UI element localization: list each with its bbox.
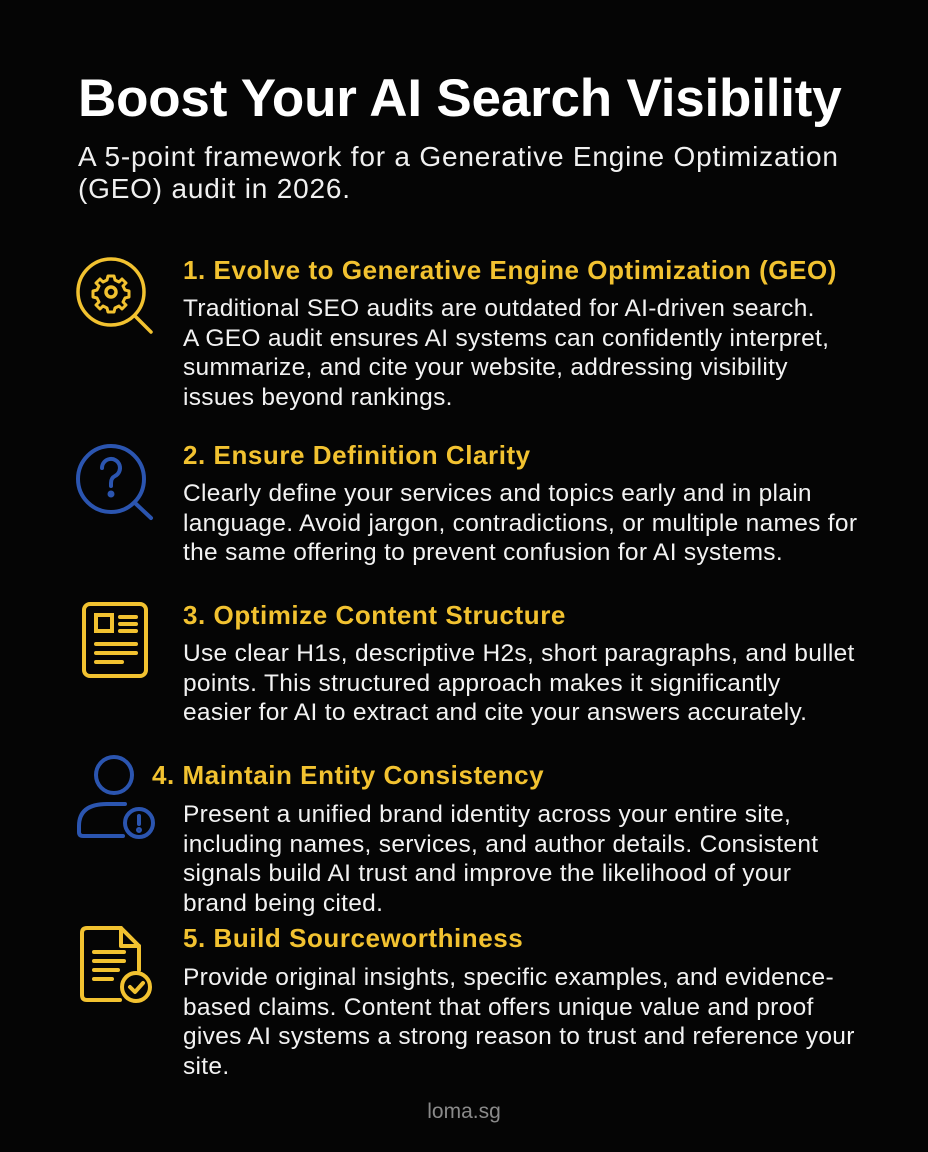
item 4 body: including names, services, and author details. Consistent xyxy=(183,830,818,858)
title: Boost Your AI Search Visibility xyxy=(78,69,842,128)
item 3 body xyxy=(183,640,855,726)
item 4 body: signals build AI trust and improve the likelihood of your xyxy=(183,860,791,887)
item 5 body: site. xyxy=(183,1052,229,1080)
item 3 body: easier for AI to extract and cite your answers accurately. xyxy=(183,699,807,726)
item 4 body xyxy=(183,801,818,916)
item 5 body: gives AI systems a strong reason to trust and reference your xyxy=(183,1023,855,1050)
item 5 body xyxy=(183,964,855,1080)
item 1 body: summarize, and cite your website, addressing visibility xyxy=(183,354,788,381)
subtitle: (GEO) audit in 2026. xyxy=(78,173,351,204)
item 4 body: brand being cited. xyxy=(183,890,383,916)
item 2 body: language. Avoid jargon, contradictions, or multiple names for xyxy=(183,510,857,536)
subtitle: A 5-point framework for a Generative Engine Optimization xyxy=(78,141,839,172)
item 2 body xyxy=(183,480,857,566)
item 1 body xyxy=(183,295,829,410)
item 1 heading: 1. Evolve to Generative Engine Optimization (GEO) xyxy=(183,255,837,285)
item 3 body: points. This structured approach makes it significantly xyxy=(183,670,781,696)
item 1 body: A GEO audit ensures AI systems can confidently interpret, xyxy=(183,324,829,352)
footer: loma.sg xyxy=(427,1100,501,1123)
item 2 body: the same offering to prevent confusion for AI systems. xyxy=(183,539,783,566)
item 4 heading: 4. Maintain Entity Consistency xyxy=(152,760,544,790)
item 1 body: issues beyond rankings. xyxy=(183,384,453,410)
item 1 body: Traditional SEO audits are outdated for AI-driven search. xyxy=(183,295,815,322)
item 2 heading: 2. Ensure Definition Clarity xyxy=(183,440,531,470)
item 3 body: Use clear H1s, descriptive H2s, short paragraphs, and bullet xyxy=(183,640,855,667)
item 2 body: Clearly define your services and topics early and in plain xyxy=(183,480,812,507)
item 5 body: Provide original insights, specific examples, and evidence- xyxy=(183,964,834,991)
item 4 body: Present a unified brand identity across your entire site, xyxy=(183,801,791,828)
subtitle xyxy=(78,141,839,204)
item 3 heading: 3. Optimize Content Structure xyxy=(183,600,566,630)
item 5 body: based claims. Content that offers unique value and proof xyxy=(183,994,814,1020)
item 5 heading: 5. Build Sourceworthiness xyxy=(183,923,523,953)
